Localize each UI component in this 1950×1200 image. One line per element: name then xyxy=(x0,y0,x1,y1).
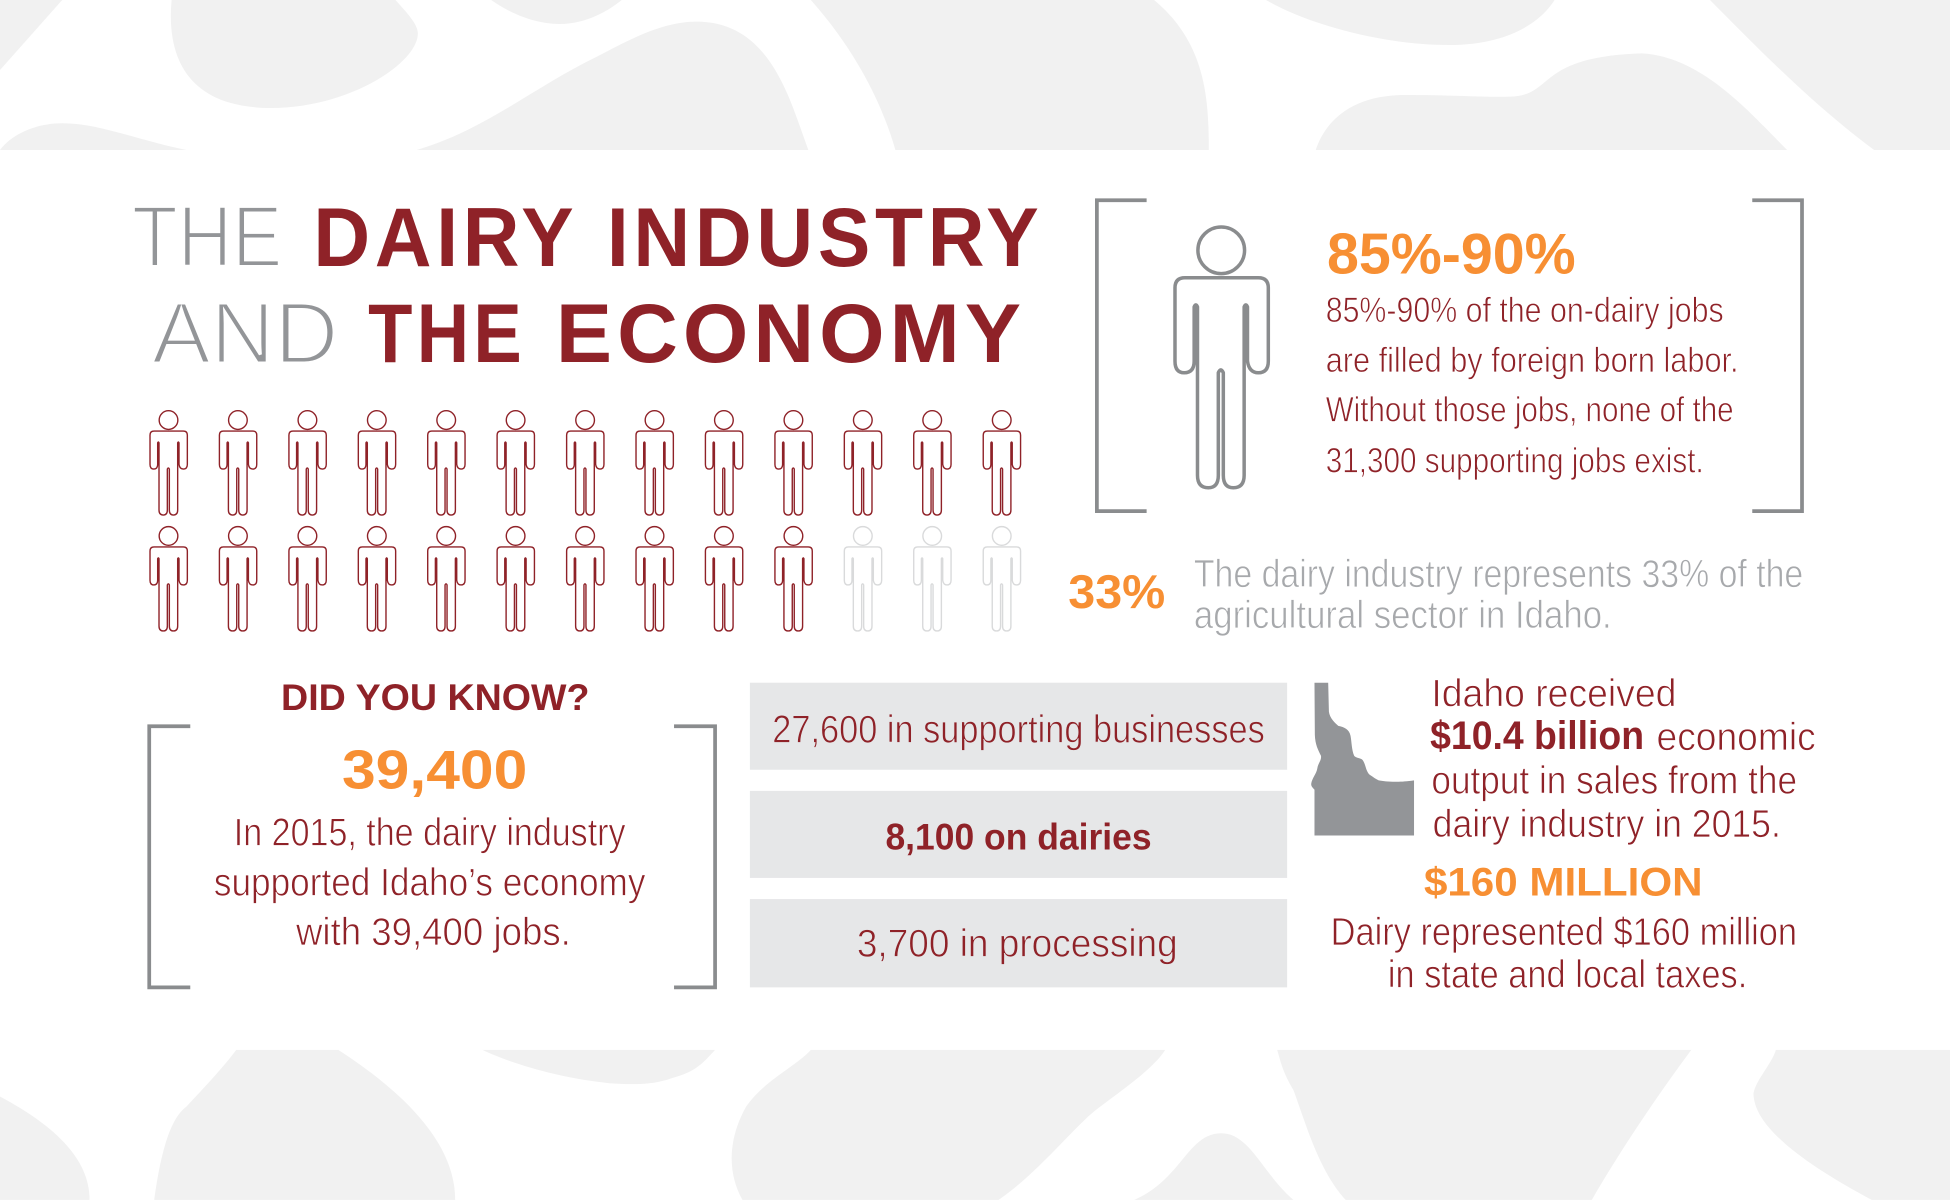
icon: Idaho state map xyxy=(1311,683,1414,835)
bracket right xyxy=(674,726,715,987)
panel: did you know xyxy=(149,676,715,987)
text block: economic output: $10.4 billion xyxy=(1430,714,1644,758)
top background pattern xyxy=(0,0,1950,150)
statistic: $160 million: $160 MILLION xyxy=(1424,860,1703,904)
panel: foreign born labor xyxy=(1097,200,1802,511)
statistic: 85%-90%: 85%-90% xyxy=(1327,223,1576,287)
title: ECONOMY xyxy=(556,287,1026,380)
text block: agricultural sector: agricultural sector in Idaho. xyxy=(1194,594,1612,637)
text block: economic output: dairy industry in 2015. xyxy=(1433,803,1781,846)
text block: state and local taxes xyxy=(1331,911,1797,996)
bracket left xyxy=(1097,200,1147,511)
text block: foreign labor: Without those jobs, none of the xyxy=(1326,391,1734,430)
text block: economic output: economic xyxy=(1657,716,1816,759)
row: processing xyxy=(750,899,1287,987)
heading: did you know: DID YOU KNOW? xyxy=(281,676,589,718)
pictogram: people grid xyxy=(150,411,1021,631)
row: processing: 3,700 in processing xyxy=(857,922,1178,965)
title: THE xyxy=(368,287,526,380)
row: on dairies xyxy=(750,791,1287,878)
panel: economic output xyxy=(1311,672,1816,996)
text block: jobs supported: supported Idaho’s economy xyxy=(214,861,646,904)
text block: foreign labor xyxy=(1326,291,1739,481)
panel: job breakdown xyxy=(750,683,1287,987)
row: on dairies: 8,100 on dairies xyxy=(885,815,1152,857)
text block: agricultural sector xyxy=(1194,553,1803,637)
title: INDUSTRY xyxy=(607,191,1043,284)
row: supporting businesses: 27,600 in supporting businesses xyxy=(772,708,1265,751)
row two: ten red figures xyxy=(150,527,812,631)
text block: state and local taxes: Dairy represented $160 million xyxy=(1331,911,1797,954)
text block: agricultural sector: The dairy industry represents 33% of the xyxy=(1194,553,1803,596)
bracket right xyxy=(1752,200,1802,511)
title xyxy=(132,189,1043,382)
statistic: 33%: 33% xyxy=(1068,566,1165,619)
statistic: 39,400: 39,400 xyxy=(342,738,527,800)
title: DAIRY xyxy=(313,191,578,284)
callout: 33% of agricultural sector xyxy=(1068,553,1803,637)
text block: economic output xyxy=(1430,672,1816,846)
row one: thirteen red figures xyxy=(150,411,1021,515)
text block: economic output: Idaho received xyxy=(1431,672,1676,715)
icon: large person xyxy=(1175,227,1268,488)
text block: foreign labor: 85%-90% of the on-dairy jobs xyxy=(1326,291,1724,330)
text block: economic output: output in sales from the xyxy=(1431,759,1797,802)
text block: jobs supported xyxy=(214,812,646,954)
text block: foreign labor: are filled by foreign born labor. xyxy=(1326,341,1739,380)
title: THE xyxy=(132,189,282,286)
text block: jobs supported: In 2015, the dairy industry xyxy=(234,812,626,855)
text block: jobs supported: with 39,400 jobs. xyxy=(295,911,571,954)
row: supporting businesses xyxy=(750,683,1287,770)
bracket left xyxy=(149,726,190,987)
text block: foreign labor: 31,300 supporting jobs exist. xyxy=(1326,442,1704,481)
text block: state and local taxes: in state and local taxes. xyxy=(1388,953,1747,996)
row two: three grey figures xyxy=(844,527,1021,631)
bottom background pattern xyxy=(0,1050,1950,1200)
title: AND xyxy=(152,285,338,382)
